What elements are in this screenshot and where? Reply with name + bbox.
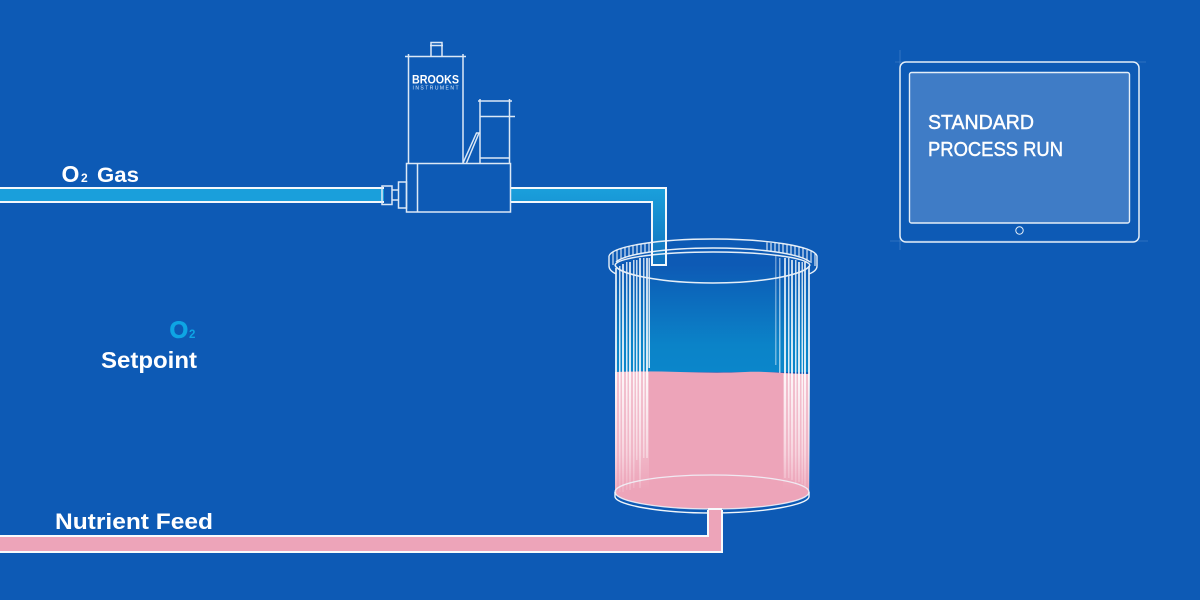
controller logo: INSTRUMENT [412,86,458,92]
O2 gas inlet pipe [0,188,384,202]
tank left wall stripes [615,258,650,494]
O2 gas outlet pipe into tank [511,188,666,265]
controller upper housing [405,54,466,163]
controller lower body [406,164,510,212]
O2 Gas label: O [62,161,79,187]
O2 Gas label [62,161,139,187]
nutrient feed pipe [0,509,722,552]
tank wall haze [615,372,809,494]
tank base [615,475,809,513]
O2 setpoint icon: 2 [189,329,195,341]
O2 setpoint icon: O [170,317,188,344]
tank [609,239,817,513]
pipe inner section over tank rim [652,238,666,265]
tank liquid [615,371,809,509]
tablet text: STANDARD [928,112,1034,134]
controller bracket [463,133,479,163]
controller side module [478,99,515,163]
O2 Gas label: Gas [97,164,139,187]
Nutrient Feed label: Nutrient Feed [55,509,213,534]
tablet frame [900,62,1139,242]
controller logo: BROOKS [412,74,459,86]
controller top stub [430,42,443,56]
tablet home button [1016,227,1023,234]
tank gas headspace [615,266,809,372]
controller logo [412,74,459,92]
tablet screen [910,72,1130,223]
Setpoint label: Setpoint [101,347,197,373]
tablet [890,50,1148,250]
tank rim [609,239,817,283]
tank right wall stripes [775,255,810,494]
mass flow controller [382,42,515,212]
tablet text [928,112,1063,161]
O2 Gas label: 2 [81,171,88,185]
controller fittings [382,182,406,208]
tablet text: PROCESS RUN [928,139,1063,161]
